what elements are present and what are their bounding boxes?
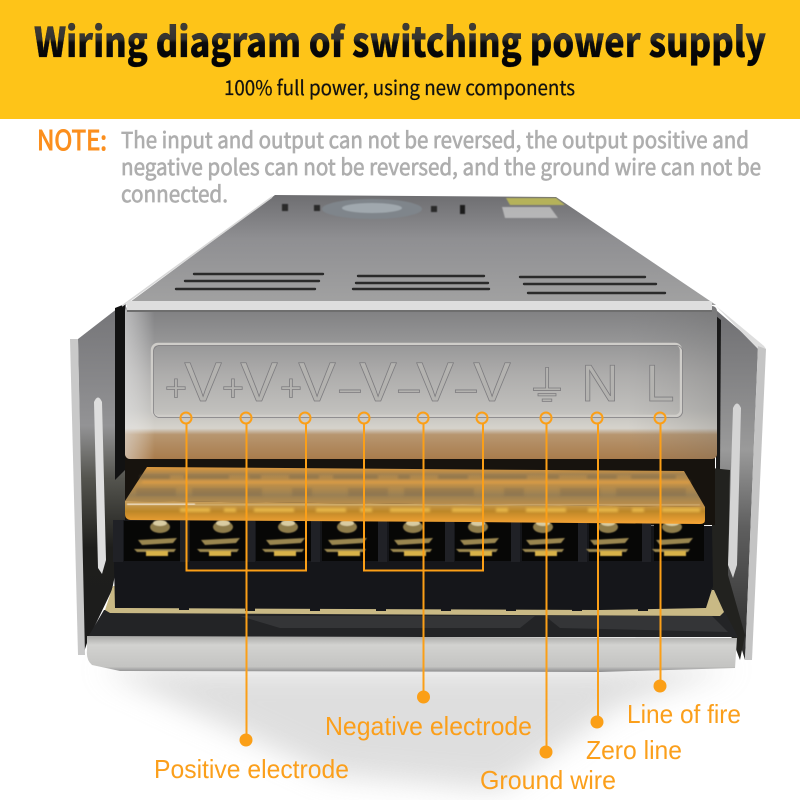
- black recess behind cover: [125, 455, 715, 525]
- note text: connected.: [121, 177, 228, 209]
- mount notches: [179, 605, 648, 611]
- amber terminal cover: [125, 467, 705, 524]
- subtitle: 100% full power, using new components: [224, 72, 575, 101]
- floor shadow: [100, 668, 735, 790]
- label: zero line: Zero line: [586, 735, 682, 765]
- embossed polarity marks: –: [339, 368, 361, 410]
- screws: [134, 520, 693, 556]
- embossed polarity marks: –: [398, 368, 420, 410]
- dividers: [113, 520, 651, 562]
- embossed polarity marks: N: [581, 355, 619, 413]
- top panel: [122, 195, 716, 306]
- label: negative electrode: Negative electrode: [325, 711, 532, 741]
- embossed polarity marks: +: [222, 368, 244, 410]
- callout: zero line: [586, 412, 682, 765]
- power supply photo illustration: [70, 195, 766, 790]
- embossed polarity marks: V: [473, 350, 511, 413]
- dark gap below terminals: [88, 610, 738, 637]
- right side flange: [712, 306, 766, 660]
- note label: NOTE:: [37, 119, 107, 158]
- embossed polarity marks: ⏚: [526, 363, 568, 410]
- embossed polarity marks: V: [359, 350, 397, 413]
- terminal block: [113, 520, 713, 611]
- top panel details: [282, 198, 565, 219]
- embossed polarity marks: V: [184, 350, 222, 413]
- embossed polarity marks: +: [280, 368, 302, 410]
- terminal cavities: [124, 521, 704, 561]
- callout: negative electrode: [325, 412, 532, 741]
- callout: ground wire: [480, 412, 616, 795]
- terminal circuit board: [105, 586, 724, 616]
- label: ground wire: Ground wire: [480, 765, 616, 795]
- embossed polarity marks: +: [165, 368, 187, 410]
- embossed polarity marks: L: [646, 355, 674, 413]
- header banner: [0, 0, 800, 119]
- front panel: [125, 301, 717, 459]
- label: line of fire: Line of fire: [627, 699, 741, 729]
- embossed polarity marks: V: [298, 350, 336, 413]
- base plate: [87, 636, 737, 672]
- embossed polarity marks: [165, 350, 674, 413]
- callout: line of fire: [627, 412, 741, 729]
- left side flange: [70, 304, 126, 655]
- embossed polarity marks: –: [455, 368, 477, 410]
- note text: [121, 123, 761, 209]
- cover glints: [127, 504, 700, 505]
- embossed polarity marks: V: [416, 350, 454, 413]
- cover streaks: [136, 477, 700, 510]
- note text: negative poles can not be reversed, and the ground wire can not be: [121, 150, 761, 182]
- callout: positive electrode: [154, 412, 349, 784]
- label: positive electrode: Positive electrode: [154, 754, 349, 784]
- note text: The input and output can not be reversed, the output positive and: [121, 123, 749, 155]
- embossed polarity marks: V: [240, 350, 278, 413]
- vent slots: [176, 274, 665, 293]
- emboss label frame: [152, 344, 681, 416]
